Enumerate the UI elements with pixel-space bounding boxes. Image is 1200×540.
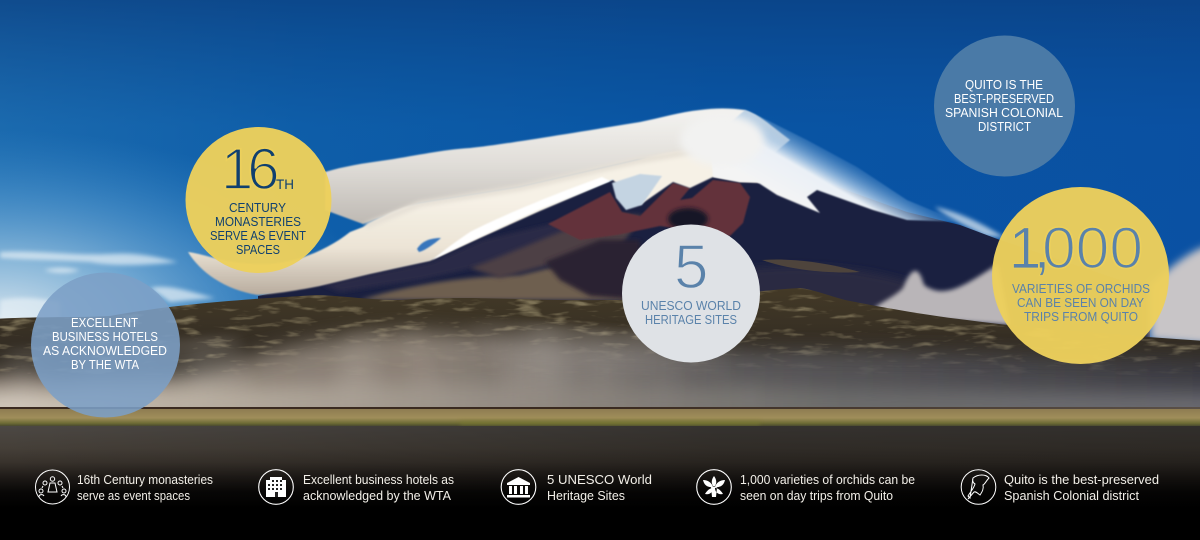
callout: best-preserved colonial district: DISTRICT bbox=[978, 120, 1031, 134]
footer item: orchids bbox=[697, 470, 915, 504]
footer item: UNESCO: Heritage Sites bbox=[547, 489, 625, 503]
footer item: colonial district: Quito is the best-preserved bbox=[1004, 473, 1159, 487]
footer item: monasteries: 16th Century monasteries bbox=[77, 473, 213, 487]
footer item: hotels: acknowledged by the WTA bbox=[303, 489, 452, 503]
icon: classical temple bbox=[501, 470, 536, 504]
footer item: hotels bbox=[259, 470, 454, 504]
icon: people around a table bbox=[36, 470, 70, 504]
callout: 5 UNESCO sites: 5 bbox=[674, 233, 708, 302]
mountain bbox=[258, 150, 1150, 420]
foreground ridge bbox=[0, 288, 1200, 420]
shore and grass band bbox=[0, 407, 1200, 426]
callout: 16th century monasteries: TH bbox=[276, 176, 294, 192]
callout: 1,000 varieties of orchids bbox=[992, 187, 1169, 364]
callout: 16th century monasteries: MONASTERIES bbox=[215, 215, 301, 229]
callout: 16th century monasteries: 16 bbox=[221, 137, 277, 202]
icon: hotel building bbox=[259, 470, 293, 504]
clouds right bbox=[874, 245, 1200, 345]
clouds: lenticular cap bbox=[188, 108, 960, 295]
callout: excellent business hotels: AS ACKNOWLEDGED bbox=[43, 344, 167, 358]
footer item: hotels: Excellent business hotels as bbox=[303, 473, 454, 487]
callout: excellent business hotels: BUSINESS HOTELS bbox=[52, 330, 158, 344]
callout: 1,000 varieties of orchids: VARIETIES OF ORCHIDS bbox=[1012, 282, 1150, 296]
callout: excellent business hotels: EXCELLENT bbox=[71, 316, 138, 330]
callout: best-preserved colonial district: QUITO IS THE bbox=[965, 78, 1043, 92]
callout: 5 UNESCO sites: UNESCO WORLD bbox=[641, 299, 741, 313]
callout: 5 UNESCO sites bbox=[622, 224, 760, 362]
callout: best-preserved colonial district: SPANISH COLONIAL bbox=[945, 106, 1063, 120]
callout: best-preserved colonial district: BEST-PRESERVED bbox=[954, 92, 1054, 106]
icon: map outline bbox=[961, 470, 996, 504]
fog bbox=[0, 320, 1200, 425]
callout: excellent business hotels: BY THE WTA bbox=[71, 358, 140, 372]
lake fading to black bbox=[0, 426, 1200, 540]
footer item: orchids: 1,000 varieties of orchids can be bbox=[740, 473, 915, 487]
callout: 16th century monasteries bbox=[186, 127, 332, 273]
callout: 1,000 varieties of orchids: 1, bbox=[1009, 216, 1050, 281]
footer item: monasteries: serve as event spaces bbox=[77, 489, 190, 503]
callout: 16th century monasteries: SPACES bbox=[236, 243, 280, 257]
footer item: UNESCO: 5 UNESCO World bbox=[547, 473, 652, 487]
callout: excellent business hotels bbox=[31, 272, 180, 418]
callout: 16th century monasteries: CENTURY bbox=[229, 201, 287, 215]
callout: 1,000 varieties of orchids: TRIPS FROM QUITO bbox=[1024, 310, 1138, 324]
callout: 1,000 varieties of orchids: CAN BE SEEN ON DAY bbox=[1017, 296, 1145, 310]
icon: orchid flower bbox=[697, 470, 731, 504]
callout: 5 UNESCO sites: HERITAGE SITES bbox=[645, 313, 737, 327]
footer item: UNESCO bbox=[501, 470, 652, 504]
footer item: monasteries bbox=[36, 470, 213, 504]
footer item: colonial district: Spanish Colonial district bbox=[1004, 489, 1140, 503]
footer item: colonial district bbox=[961, 470, 1159, 504]
callout: 1,000 varieties of orchids: 000 bbox=[1042, 216, 1143, 281]
red ridges bbox=[548, 180, 750, 240]
callout: 16th century monasteries: SERVE AS EVENT bbox=[210, 229, 306, 243]
footer item: orchids: seen on day trips from Quito bbox=[740, 489, 893, 503]
sky bbox=[0, 0, 1200, 420]
callout: best-preserved colonial district bbox=[934, 36, 1075, 176]
ridge vegetation texture bbox=[0, 288, 1200, 375]
